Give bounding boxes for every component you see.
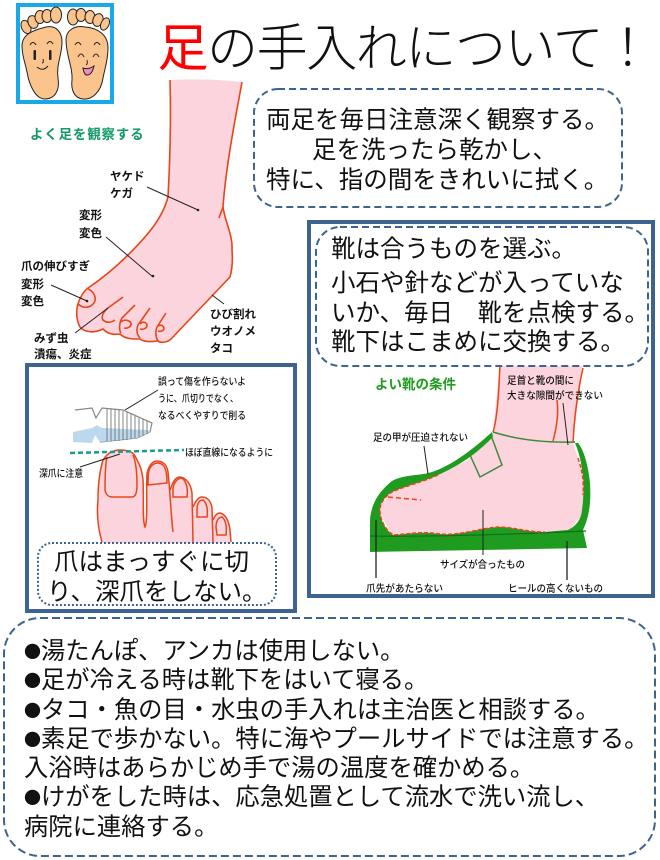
illustration: shoe conditions: 足の甲が圧迫されない	[373, 431, 468, 444]
illustration: toes and nail file: うに、爪切りでなく、	[158, 393, 238, 405]
callout: daily observation	[254, 89, 622, 207]
illustration: foot with observation points	[51, 79, 242, 342]
icon: smiling feet	[18, 5, 112, 102]
callout: nail cutting	[38, 543, 276, 606]
callout: daily observation: 特に、指の間をきれいに拭く。	[266, 166, 608, 194]
panel: daily care list: 入浴時はあらかじめ手で湯の温度を確かめる。	[24, 755, 534, 782]
panel: daily care list: ●	[24, 726, 41, 751]
panel: choosing shoes	[309, 222, 653, 596]
illustration: toes and nail file: 深爪に注意	[39, 467, 83, 480]
foot labels: ひび割れ	[210, 307, 256, 321]
panel: nail care	[27, 365, 295, 611]
illustration: toes and nail file: ほぼ直線になるように	[185, 446, 273, 459]
panel: daily care list: 足が冷える時は靴下をはいて寝る。	[41, 667, 428, 694]
illustration: shoe conditions: 足首と靴の間に	[507, 374, 574, 387]
illustration: shoe conditions: 爪先があたらない	[366, 582, 443, 595]
panel: daily care list: 湯たんぽ、アンカは使用しない。	[41, 638, 404, 665]
callout: daily observation: 両足を毎日注意深く観察する。	[266, 106, 609, 134]
panel: daily care list: ●	[24, 667, 41, 692]
panel: daily care list: 病院に連絡する。	[24, 814, 218, 841]
callout: shoe check: いか、毎日 靴を点検する。	[331, 299, 649, 327]
illustration: shoe conditions: ヒールの高くないもの	[508, 582, 603, 595]
foot labels: 潰瘍、炎症	[34, 347, 92, 361]
foot labels: 変色	[79, 226, 102, 240]
callout: shoe check: 靴下はこまめに交換する。	[331, 328, 625, 356]
panel: daily care list: ●	[24, 697, 41, 722]
foot labels: ウオノメ	[210, 325, 256, 338]
title: の手入れについて！	[207, 20, 652, 77]
panel: daily care list: けがをした時は、応急処置として流水で洗い流し、	[41, 784, 599, 811]
title: 足	[158, 20, 208, 77]
illustration: toes and nail file	[39, 375, 273, 545]
callout: shoe check: 小石や針などが入っていな	[331, 269, 624, 297]
foot labels: 変形	[21, 277, 44, 291]
panel: daily care list	[4, 618, 655, 856]
panel: daily care list: ●	[24, 638, 41, 663]
foot labels: 変形	[79, 208, 102, 222]
callout: shoe check	[316, 227, 649, 366]
foot labels: 爪の伸びすぎ	[21, 259, 90, 273]
illustration: shoe conditions: 大きな隙間ができない	[507, 389, 603, 402]
illustration: shoe conditions	[366, 362, 603, 595]
foot labels: みず虫	[34, 331, 69, 345]
panel: daily care list: ●	[24, 784, 41, 809]
foot labels: ケガ	[110, 186, 133, 200]
illustration: toes and nail file: なるべくやすりで削る	[158, 409, 246, 422]
illustration: shoe conditions: サイズが合ったもの	[440, 558, 525, 571]
foot labels: ヤケド	[110, 170, 144, 183]
panel: daily care list: タコ・魚の目・水虫の手入れは主治医と相談する。	[41, 697, 600, 724]
callout: nail cutting: 爪はまっすぐに切	[54, 549, 249, 576]
illustration: toes and nail file: 誤って傷を作らないよ	[158, 375, 246, 388]
callout: daily observation: 足を洗ったら乾かし、	[312, 136, 557, 164]
heading: observe feet: よく足を観察する	[30, 126, 144, 142]
callout: shoe check: 靴は合うものを選ぶ。	[331, 235, 576, 263]
foot labels: タコ	[210, 342, 233, 355]
callout: nail cutting: り、深爪をしない。	[47, 579, 267, 606]
foot labels	[21, 170, 256, 361]
foot labels: 変色	[21, 294, 44, 308]
illustration: shoe conditions: よい靴の条件	[375, 376, 456, 392]
panel: daily care list: 素足で歩かない。特に海やプールサイドでは注意する。	[41, 726, 648, 753]
